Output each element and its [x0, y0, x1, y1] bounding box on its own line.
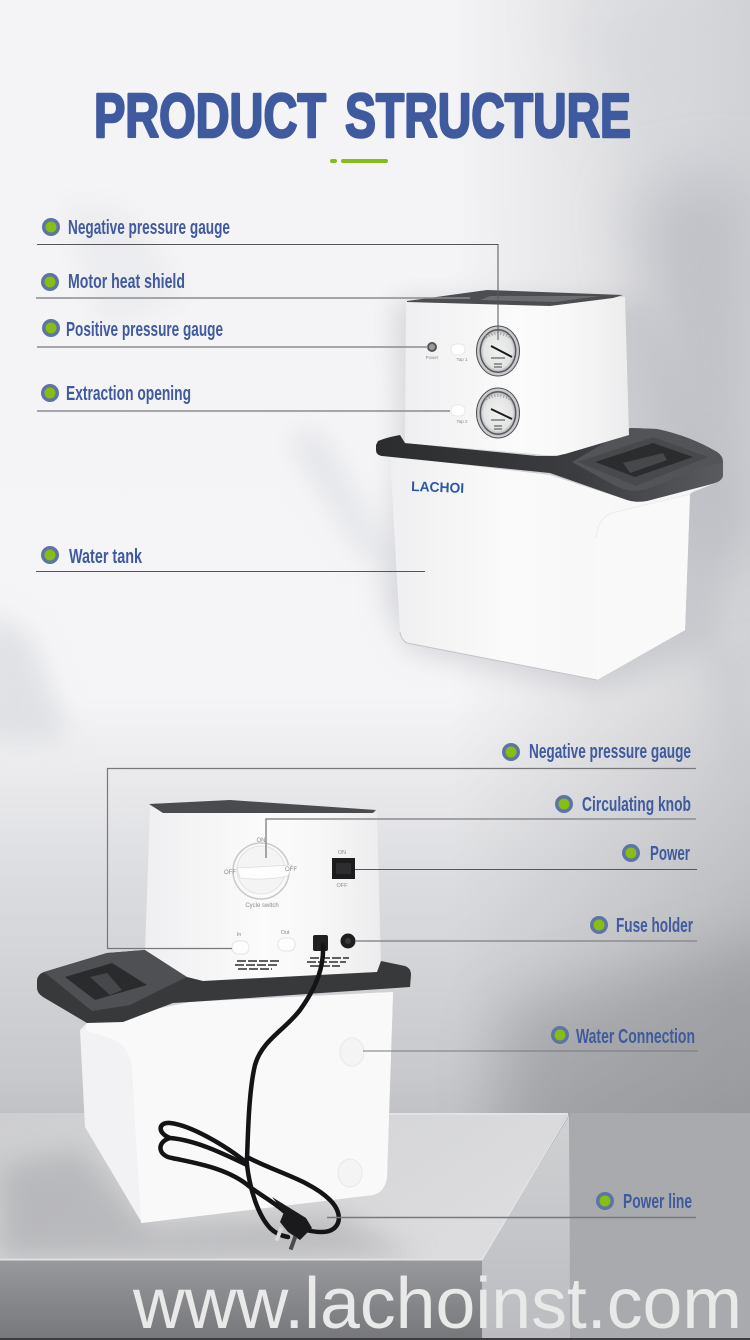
cycle switch knob: OFF [285, 867, 297, 873]
callout: Positive pressure gauge [37, 319, 428, 347]
product: rear view of vacuum pump [37, 800, 411, 1250]
callout: Extraction opening [37, 383, 450, 411]
callout: Motor heat shield [36, 271, 470, 298]
power indicator [426, 342, 439, 360]
dark shelf rear [37, 950, 411, 1023]
power rocker switch: OFF [336, 883, 348, 889]
cycle switch knob: OFF [224, 870, 236, 876]
callout: Positive pressure gauge: Positive pressure gauge [66, 319, 223, 341]
power rocker switch: ON [338, 850, 346, 856]
callout: Power [355, 843, 697, 870]
vents [235, 958, 349, 969]
callout: Power line [327, 1191, 696, 1218]
power rocker switch [332, 850, 355, 889]
callout: Water tank [36, 546, 425, 572]
callout: Negative pressure gauge (rear) [108, 741, 696, 948]
callout: Fuse holder: Fuse holder [616, 915, 693, 937]
product: front view of vacuum pump [376, 290, 735, 690]
title accent: green dash [330, 159, 388, 163]
fittings: Tap 2 [456, 419, 468, 424]
callout: Motor heat shield: Motor heat shield [68, 271, 185, 293]
callout: Circulating knob [266, 794, 696, 858]
water tank [390, 456, 723, 680]
callout: Extraction opening: Extraction opening [66, 383, 191, 405]
water tank rear [80, 992, 393, 1223]
gauge 1 [476, 326, 520, 376]
callout: Negative pressure gauge (front): Negative pressure gauge [68, 217, 230, 239]
gauge 2 [476, 388, 520, 438]
callout: Negative pressure gauge (front) [37, 217, 498, 340]
callout: Water Connection: Water Connection [576, 1026, 695, 1048]
cycle switch knob [224, 838, 297, 909]
title: STRUCTURE [345, 82, 631, 151]
title [94, 82, 631, 151]
motor housing [405, 290, 629, 455]
rear fittings: Out [281, 930, 290, 936]
callout: Power: Power [650, 843, 690, 865]
rear fittings [232, 930, 295, 954]
fuse holder and inlet [313, 934, 356, 951]
dark shelf with handle [376, 428, 723, 502]
cycle switch knob: ON [256, 838, 266, 844]
motor housing rear [145, 800, 381, 981]
fittings [451, 344, 468, 424]
callout: Water Connection [363, 1026, 698, 1051]
callout: Fuse holder [355, 915, 697, 941]
callout: Power line: Power line [623, 1191, 692, 1213]
water connectors [338, 1038, 364, 1187]
power indicator: Power [426, 355, 439, 360]
fittings: Tap 1 [456, 357, 468, 362]
power cord with plug [160, 945, 339, 1250]
title: PRODUCT [94, 82, 326, 151]
callout: Circulating knob: Circulating knob [582, 794, 691, 816]
shadow behind product [385, 300, 735, 690]
rear fittings: In [237, 932, 241, 938]
pedestal block [0, 1113, 750, 1340]
callout: Water tank: Water tank [69, 546, 143, 568]
logo: LACHOI [411, 478, 464, 496]
cycle switch knob: Cycle switch [245, 903, 279, 909]
